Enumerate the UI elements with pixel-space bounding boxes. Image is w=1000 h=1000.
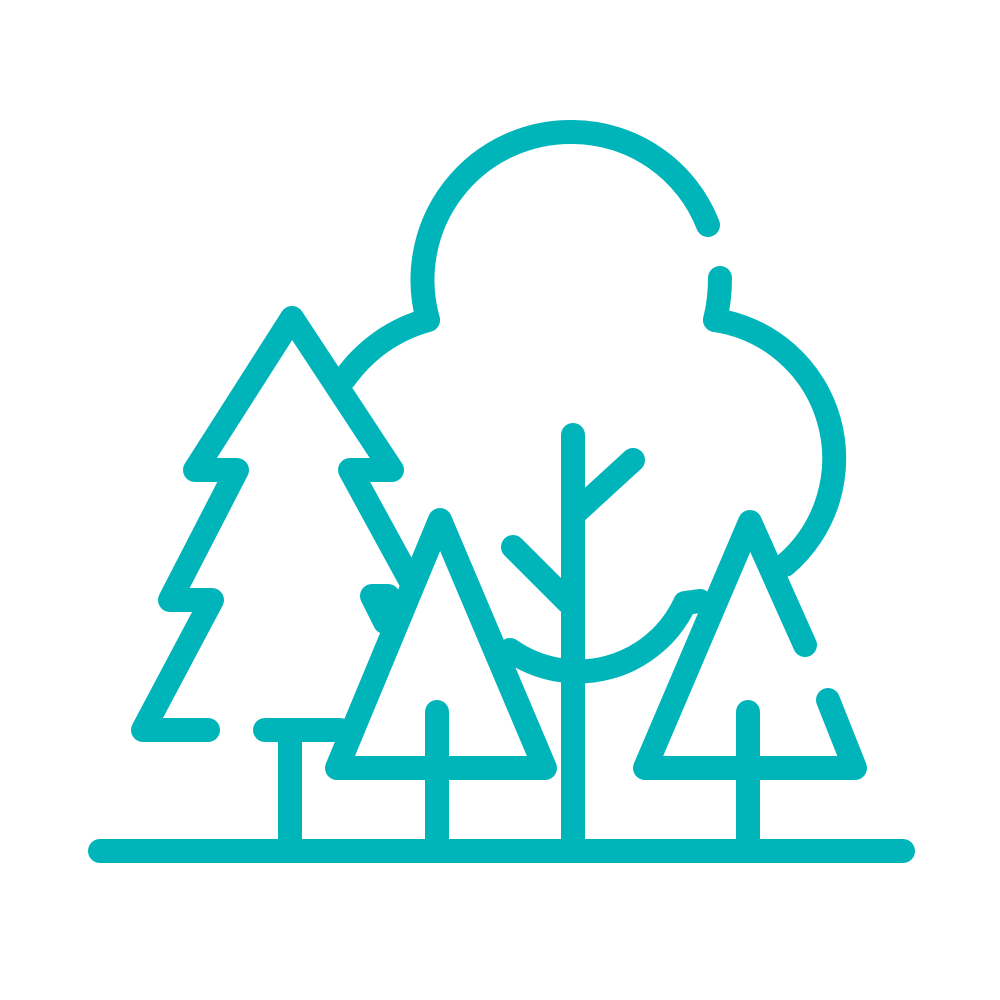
left pine tree: [143, 318, 410, 851]
right pine tree: [645, 522, 855, 851]
small pine tree: [337, 520, 545, 851]
large deciduous tree: [345, 132, 834, 851]
ground line: [100, 839, 903, 863]
